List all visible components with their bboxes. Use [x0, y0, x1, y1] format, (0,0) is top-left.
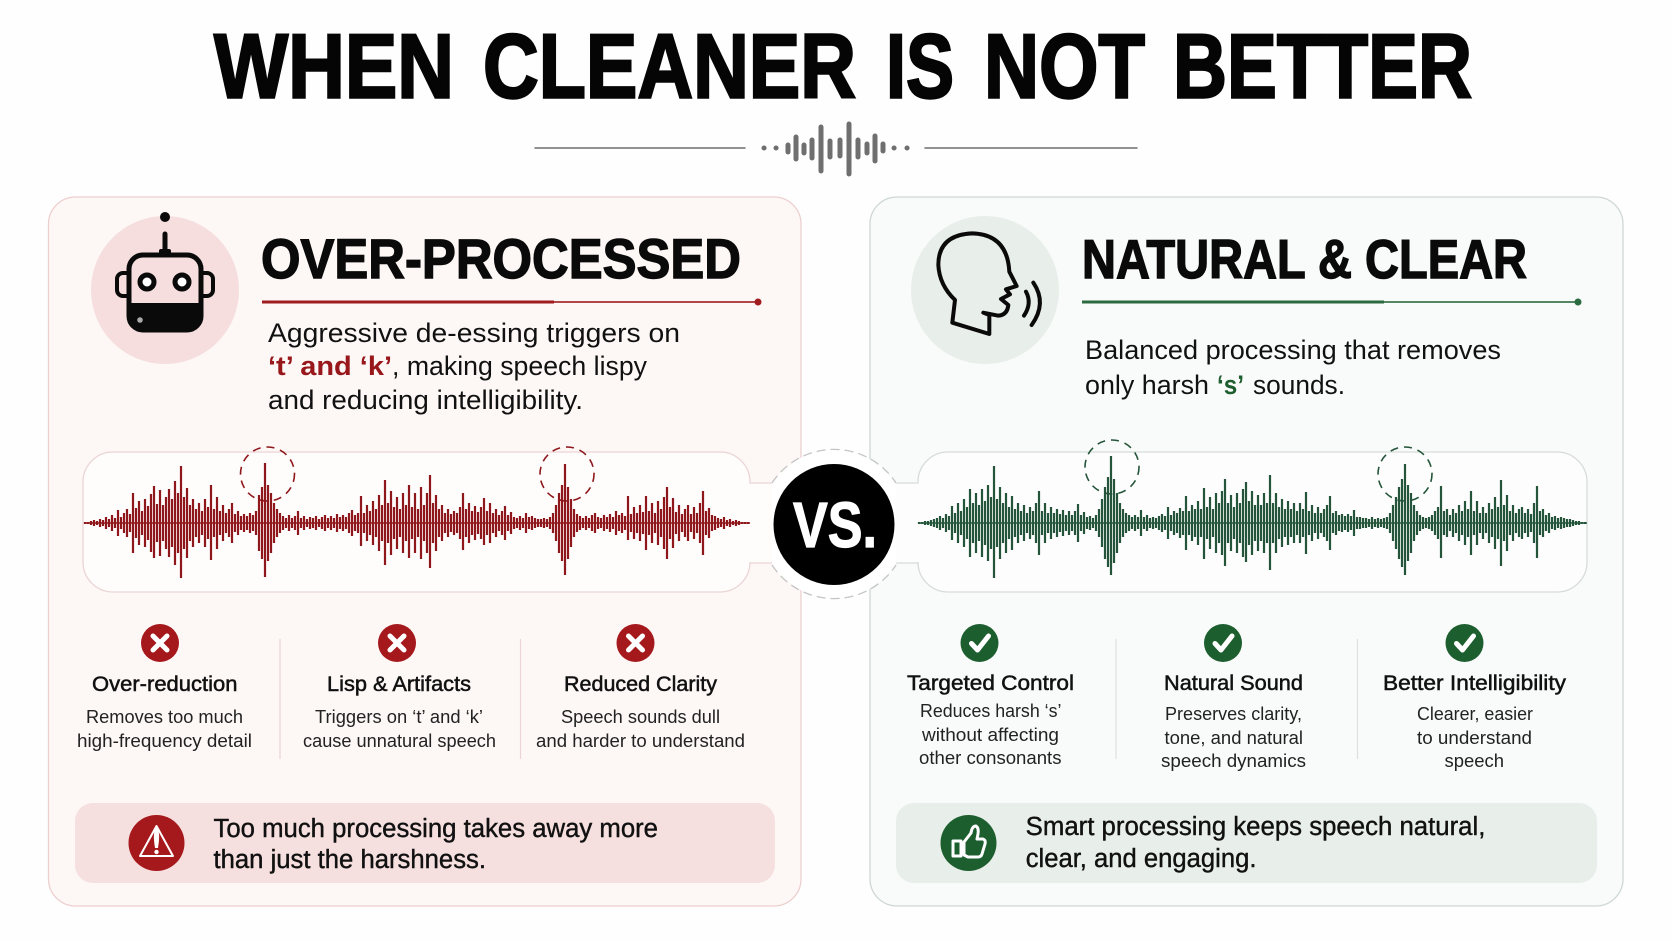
point: reduced clarity: Speech sounds dull — [561, 707, 720, 727]
title — [214, 16, 1472, 118]
panel: natural and clear — [870, 197, 1623, 906]
callout: thumbs up — [896, 803, 1597, 883]
title: BETTER — [1173, 16, 1472, 118]
callout: warning: Too much processing takes away more — [214, 815, 658, 843]
title divider with waveform — [535, 124, 1137, 174]
description text — [1085, 335, 1501, 400]
point: over-reduction: Removes too much — [86, 707, 243, 727]
icon: cross — [378, 624, 416, 662]
heading: natural and clear: NATURAL & CLEAR — [1082, 228, 1527, 290]
point: lisp and artifacts: cause unnatural speech — [303, 731, 496, 751]
point: over-reduction — [77, 624, 252, 751]
point: reduced clarity: and harder to understand — [536, 731, 745, 751]
waveform: natural — [896, 440, 1587, 592]
point: natural sound: speech dynamics — [1161, 751, 1306, 771]
icon: thumbs up — [940, 815, 996, 871]
icon: robot — [91, 212, 239, 364]
point: targeted control: without affecting — [921, 725, 1059, 745]
column dividers — [280, 639, 520, 759]
callout: warning — [75, 803, 775, 883]
description text: and reducing intelligibility. — [268, 385, 583, 415]
point: better intelligibility: Clearer, easier — [1417, 704, 1533, 724]
callout: thumbs up: Smart processing keeps speech natural, — [1026, 813, 1485, 841]
heading: over-processed: OVER-PROCESSED — [261, 227, 741, 290]
icon: check — [1446, 624, 1484, 662]
point: targeted control: other consonants — [919, 748, 1062, 768]
heading rule — [262, 298, 762, 306]
point: targeted control: Targeted Control — [907, 672, 1074, 695]
panel: over-processed — [48, 197, 801, 906]
column dividers right — [1116, 639, 1358, 759]
description text — [268, 318, 680, 415]
description text: , making speech lispy — [392, 351, 647, 381]
point: natural sound: Preserves clarity, — [1165, 704, 1302, 724]
point: natural sound: tone, and natural — [1164, 728, 1303, 748]
icon: speaking head — [911, 216, 1059, 364]
point: over-reduction: Over-reduction — [92, 673, 238, 696]
point: better intelligibility: speech — [1444, 751, 1504, 771]
callout: warning: than just the harshness. — [214, 846, 486, 874]
vs badge: VS. — [793, 489, 877, 561]
highlight circles — [1085, 440, 1432, 501]
point: reduced clarity: Reduced Clarity — [564, 673, 718, 696]
icon: warning triangle — [128, 815, 184, 871]
title: NOT — [984, 16, 1145, 118]
point: lisp and artifacts: Triggers on ‘t’ and ‘k’ — [315, 707, 483, 727]
point: natural sound — [1161, 624, 1306, 771]
icon: cross — [141, 624, 179, 662]
heading rule — [1082, 298, 1582, 306]
description text: ‘s’ — [1217, 370, 1244, 400]
description text: Balanced processing that removes — [1085, 335, 1501, 365]
title: CLEANER — [483, 16, 856, 118]
description text: only harsh — [1085, 370, 1209, 400]
highlight circles — [240, 447, 594, 501]
description text: ‘t’ and ‘k’ — [268, 351, 392, 381]
title: WHEN — [214, 16, 454, 118]
point: better intelligibility — [1383, 624, 1567, 771]
point: lisp and artifacts: Lisp & Artifacts — [327, 673, 471, 696]
point: targeted control: Reduces harsh ‘s’ — [920, 701, 1062, 721]
callout: thumbs up: clear, and engaging. — [1026, 845, 1256, 873]
icon: cross — [616, 624, 654, 662]
description text: Aggressive de-essing triggers on — [268, 318, 680, 348]
point: natural sound: Natural Sound — [1164, 672, 1303, 695]
point: over-reduction: high-frequency detail — [77, 731, 252, 751]
vs badge — [750, 449, 918, 599]
point: lisp and artifacts — [303, 624, 496, 751]
title: IS — [886, 16, 954, 118]
description text: sounds. — [1253, 370, 1345, 400]
point: targeted control — [907, 624, 1074, 768]
waveform: over-processed — [83, 447, 772, 592]
icon: check — [1204, 624, 1242, 662]
point: reduced clarity — [536, 624, 745, 751]
point: better intelligibility: to understand — [1417, 728, 1532, 748]
icon: check — [960, 624, 998, 662]
point: better intelligibility: Better Intelligibility — [1383, 672, 1567, 695]
